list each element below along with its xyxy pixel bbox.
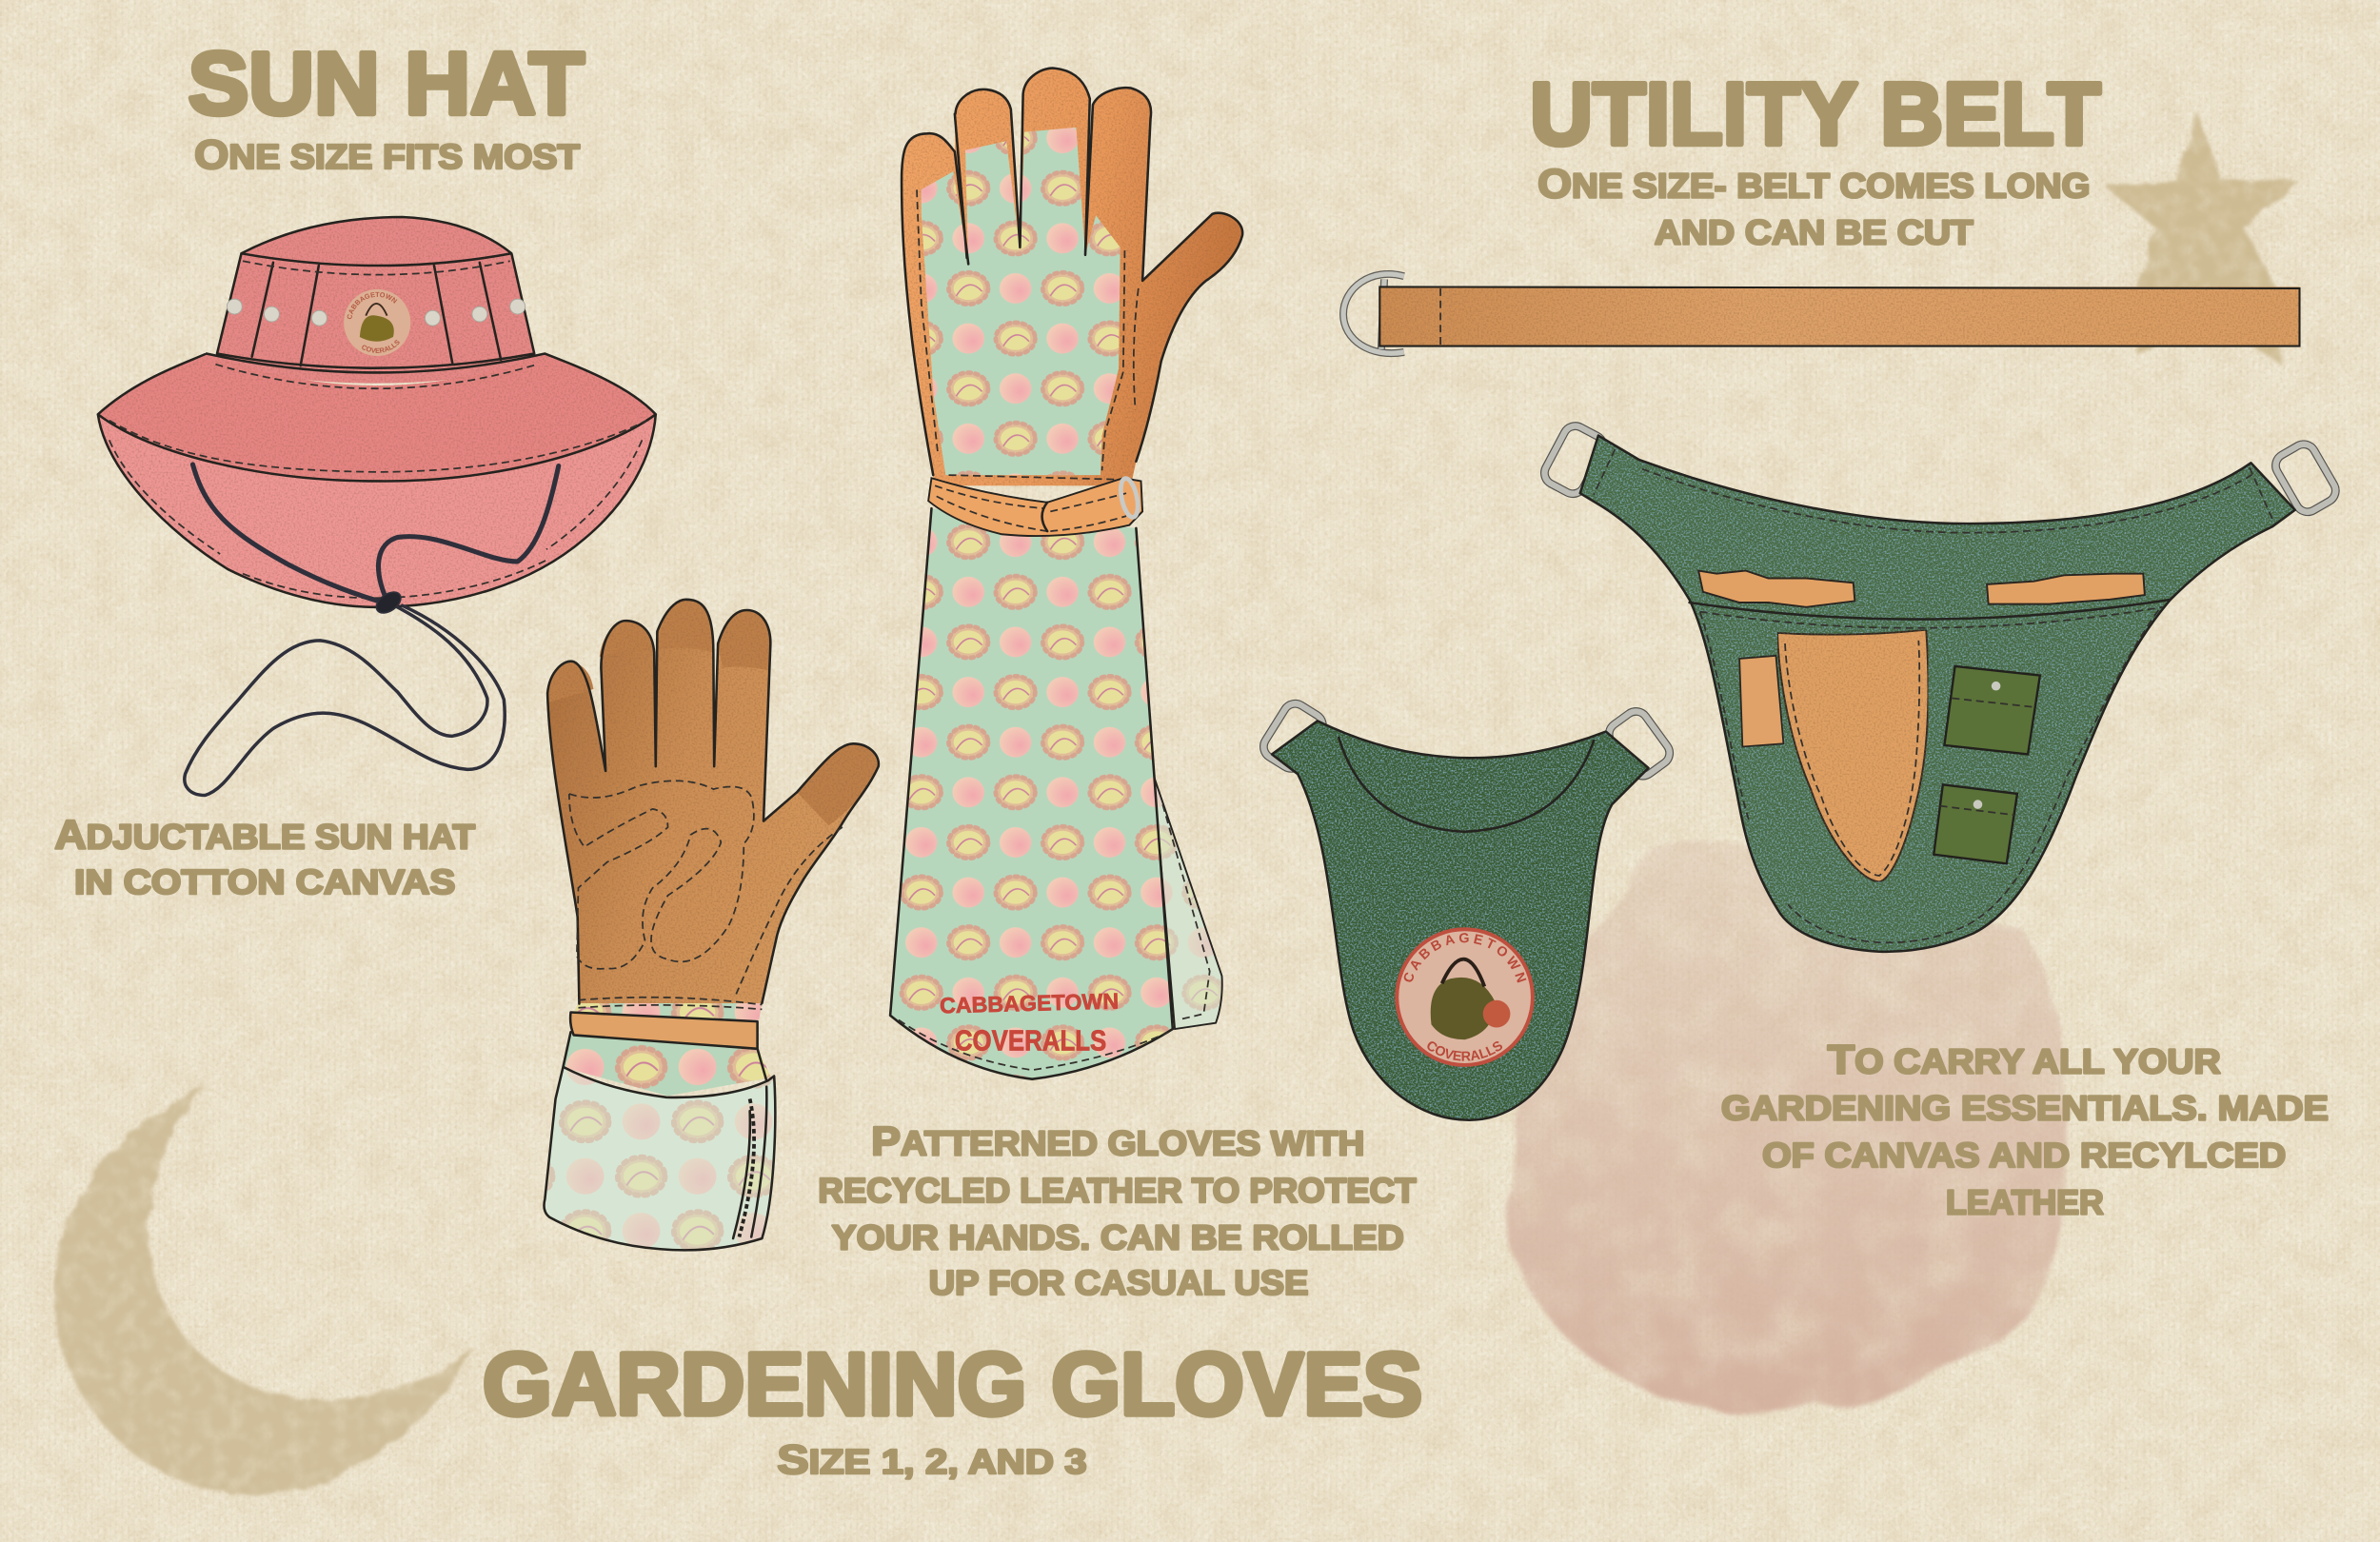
stain watermark — [1509, 845, 2073, 1412]
heading: utility belt: UTILITY BELT — [1530, 64, 2101, 163]
pouch body — [1580, 436, 2295, 952]
pouch upper pocket — [1944, 666, 2040, 754]
caption: gardening gloves: YOUR HANDS. CAN BE ROLLED — [832, 1218, 1404, 1256]
icon: pink sun hat — [97, 215, 657, 798]
belt ring — [1343, 274, 1404, 353]
short glove leather — [547, 600, 879, 1004]
caption: gardening gloves: PATTERNED GLOVES WITH — [871, 1118, 1364, 1164]
icon: leather belt with ring — [1343, 274, 2299, 353]
caption: utility pouch: GARDENING ESSENTIALS. MADE — [1721, 1090, 2329, 1128]
glove printed logo: COVERALLS — [955, 1025, 1106, 1057]
small pouch badge: CABBAGETOWN — [1403, 933, 1527, 982]
caption: utility pouch: LEATHER — [1946, 1184, 2104, 1222]
icon: long patterned gauntlet glove — [890, 69, 1242, 1079]
caption: gardening gloves: UP FOR CASUAL USE — [929, 1264, 1308, 1302]
heading: gardening gloves: GARDENING GLOVES — [483, 1334, 1422, 1433]
moon watermark — [54, 1085, 473, 1495]
icon: short leather glove — [544, 600, 879, 1250]
pouch leather tool pocket — [1777, 630, 1928, 881]
glove mint palm — [922, 128, 1121, 475]
heading: utility belt — [1530, 64, 2101, 252]
pouch rings — [1540, 422, 2340, 516]
heading: sun hat: SUN HAT — [188, 34, 585, 133]
glove printed logo: CABBAGETOWN — [940, 988, 1119, 1018]
pouch small leather tab — [1739, 656, 1783, 746]
small pouch badge — [1395, 927, 1535, 1067]
hat badge — [344, 289, 411, 356]
hat rivets — [227, 299, 526, 326]
glove wrist strap — [928, 478, 1142, 536]
heading: sun hat — [188, 34, 585, 178]
glove printed logo — [940, 988, 1119, 1057]
caption: sun hat — [54, 812, 475, 901]
caption: sun hat: IN COTTON CANVAS — [74, 863, 455, 901]
short glove wrist strap — [570, 1013, 758, 1049]
caption: utility pouch: TO CARRY ALL YOUR — [1828, 1037, 2221, 1082]
caption: utility pouch: OF CANVAS AND RECYLCED — [1762, 1137, 2286, 1175]
glove strap buckle — [1118, 477, 1140, 519]
star watermark — [2104, 109, 2298, 365]
belt strap — [1379, 287, 2299, 346]
glove gauntlet — [890, 508, 1173, 1079]
pouch leather loops — [1698, 571, 2145, 607]
subheading: sun hat size: ONE SIZE FITS MOST — [194, 132, 580, 178]
heading: gardening gloves — [483, 1334, 1422, 1483]
small pouch body — [1272, 721, 1649, 1120]
subheading: glove sizes: SIZE 1, 2, AND 3 — [777, 1437, 1087, 1483]
short glove palm stitching — [569, 781, 843, 1009]
icon: small canvas pouch — [1259, 699, 1674, 1121]
hat badge: CABBAGETOWN — [347, 291, 398, 320]
subheading: belt size: ONE SIZE- BELT COMES LONG — [1537, 161, 2090, 207]
subheading: belt size — [1537, 161, 2090, 252]
caption: sun hat: ADJUCTABLE SUN HAT — [54, 812, 475, 858]
short glove rolled cuff — [544, 1067, 775, 1250]
short glove fingertips — [547, 600, 879, 825]
short glove wrist mint — [562, 1003, 771, 1096]
hat chin strap and cord — [185, 465, 559, 796]
caption: gardening gloves: RECYCLED LEATHER TO PROTECT — [818, 1172, 1417, 1210]
small pouch badge: COVERALLS — [1427, 1041, 1502, 1061]
hat brim — [98, 354, 656, 482]
pouch lower pocket — [1934, 784, 2017, 863]
hat underside — [98, 414, 656, 607]
hat badge: COVERALLS — [362, 340, 400, 353]
hat crown — [207, 217, 545, 384]
caption: gardening gloves — [818, 1118, 1417, 1302]
subheading: belt size: AND CAN BE CUT — [1655, 214, 1973, 252]
small pouch rings — [1259, 699, 1675, 781]
icon: large canvas utility pouch — [1540, 422, 2340, 952]
glove leather hand — [902, 69, 1242, 485]
glove side flap — [1154, 776, 1222, 1029]
caption: utility pouch — [1721, 1037, 2329, 1222]
